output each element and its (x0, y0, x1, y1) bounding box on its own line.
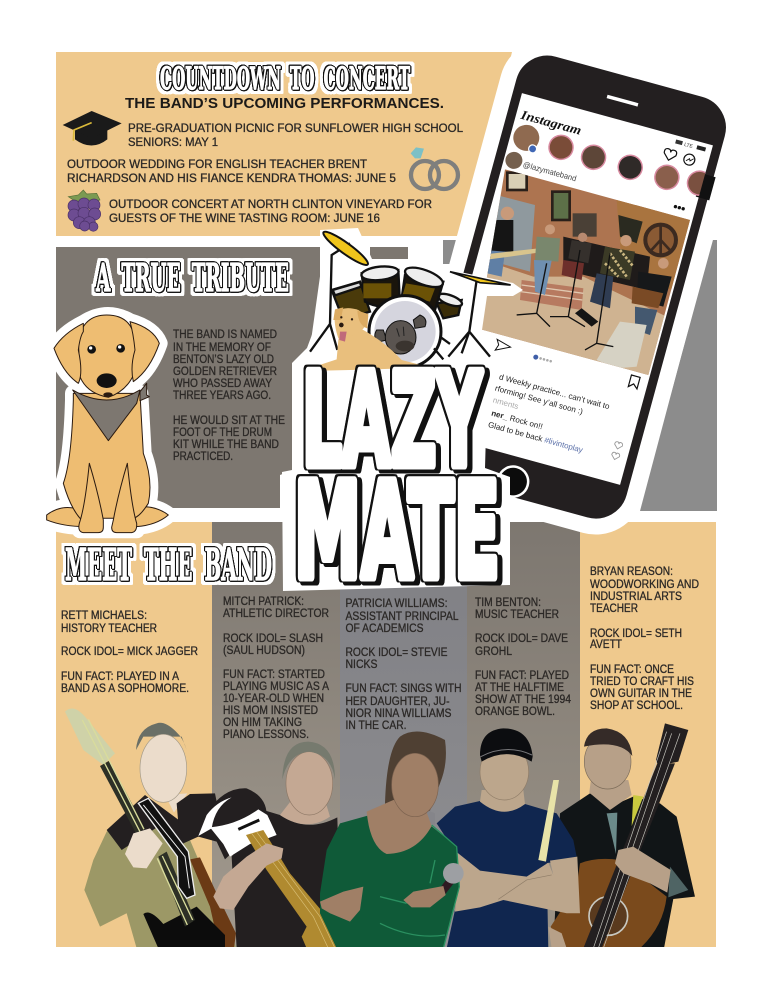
text: Mitch Patrick: PIANO LESSONS. (223, 729, 309, 741)
panel: meet the band columns (56, 522, 716, 947)
text: tribute story: FOOT OF THE DRUM (173, 427, 272, 439)
text: Bryan Reason: WOODWORKING AND (590, 579, 699, 591)
figure: Tim with drumstick (437, 728, 580, 948)
text: Patricia Williams: NIOR NINA WILLIAMS (346, 708, 452, 720)
toms (332, 264, 463, 320)
text: Bryan Reason: SHOP AT SCHOOL. (590, 700, 683, 712)
text: A TRUE TRIBUTE (96, 255, 289, 300)
text: COUNTDOWN TO CONCERT (160, 61, 410, 97)
illustration: band members (65, 708, 695, 948)
text: Patricia Williams: PATRICIA WILLIAMS: (346, 598, 448, 610)
text: tribute story: GOLDEN RETRIEVER (173, 366, 277, 378)
text: Rett Michaels (61, 610, 198, 695)
panel: a true tribute (56, 247, 322, 508)
icons: comment hearts (611, 441, 623, 461)
icon: graduation cap (63, 111, 122, 145)
text: Tim Benton (475, 597, 572, 718)
logo: LAZY MATE wordmark (294, 347, 500, 609)
Instagram interface (488, 110, 706, 460)
icon: sitting golden retriever (47, 315, 168, 533)
panel: countdown to concert (56, 52, 512, 236)
text: Tim Benton: FUN FACT: PLAYED (475, 670, 569, 682)
post caption: rforming! See y’all soon :) (494, 384, 584, 416)
text: Patricia Williams (346, 598, 462, 732)
text: tribute story: IN THE MEMORY OF (173, 342, 271, 354)
text: Bryan Reason: BRYAN REASON: (590, 566, 673, 578)
text: Tim Benton: ROCK IDOL= DAVE (475, 633, 568, 645)
text: Rett Michaels: ROCK IDOL= MICK JAGGER (61, 646, 198, 658)
text: tribute story: HE WOULD SIT AT THE (173, 415, 285, 427)
panel: grey backdrop right (640, 240, 717, 511)
text: Patricia Williams: OF ACADEMICS (346, 623, 424, 635)
text: Bryan Reason: FUN FACT: ONCE (590, 664, 674, 676)
status bar: LTE (683, 142, 694, 150)
photo of band practice (482, 170, 690, 375)
text: Mitch Patrick: ON HIM TAKING (223, 717, 302, 729)
text: Mitch Patrick: (SAUL HUDSON) (223, 645, 305, 657)
lying golden retriever (309, 307, 430, 371)
bass drum with buffalo (369, 296, 441, 368)
icon: send (494, 339, 512, 354)
icon: more dots (673, 205, 685, 211)
text: Patricia Williams: IN THE CAR. (346, 720, 406, 732)
post caption: nments (492, 396, 519, 411)
figure: Rett with guitar (65, 708, 237, 948)
text: Mitch Patrick: FUN FACT: STARTED (223, 669, 325, 681)
figure: Mitch with electric guitar (198, 742, 342, 948)
text: Mitch Patrick (223, 596, 329, 741)
text: Patricia Williams: ASSISTANT PRINCIPAL (346, 611, 459, 623)
logo: LAZY MATE wordmark: LAZY (302, 347, 483, 496)
text: tribute story: WHO PASSED AWAY (173, 378, 272, 390)
text: Mitch Patrick: ROCK IDOL= SLASH (223, 633, 323, 645)
phone body (400, 38, 743, 536)
right cymbal (448, 272, 511, 357)
text: Tim Benton: TIM BENTON: (475, 597, 541, 609)
text: tribute story: KIT WHILE THE BAND (173, 439, 279, 451)
text: Tim Benton: GROHL (475, 646, 513, 658)
text: upcoming performances: THE BAND’S UPCOMING PERFORMANCES. (125, 96, 444, 112)
text: upcoming performances: SENIORS: MAY 1 (128, 137, 218, 149)
figure: Bryan with acoustic guitar (548, 723, 695, 948)
text: Bryan Reason: TRIED TO CRAFT HIS (590, 676, 694, 688)
figure: Patricia with microphone (320, 732, 464, 948)
text: Patricia Williams: NICKS (346, 659, 378, 671)
story circles (513, 124, 706, 196)
text: Bryan Reason: ROCK IDOL= SETH (590, 628, 682, 640)
text: tribute story (173, 329, 285, 463)
Instagram wordmark: Instagram (518, 107, 583, 138)
icon: bookmark (628, 375, 640, 389)
text: tribute story: THREE YEARS AGO. (173, 390, 271, 402)
text: Rett Michaels: HISTORY TEACHER (61, 623, 157, 635)
text: Mitch Patrick: ATHLETIC DIRECTOR (223, 608, 329, 620)
post caption: Glad to be back #livintoplay (487, 420, 584, 455)
text: Bryan Reason: OWN GUITAR IN THE (590, 688, 692, 700)
text: Patricia Williams: HER DAUGHTER, JU- (346, 696, 450, 708)
left cymbal (310, 228, 371, 352)
post caption: ner_ Rock on!! (490, 409, 544, 431)
panel: grey backdrop behind drums (443, 240, 459, 264)
text: Patricia Williams: FUN FACT: SINGS WITH (346, 683, 462, 695)
profile handle: @lazymateband (522, 160, 577, 183)
text: Bryan Reason: INDUSTRIAL ARTS (590, 591, 682, 603)
text: Tim Benton: AT THE HALFTIME (475, 682, 564, 694)
profile handle (503, 150, 579, 186)
text: Rett Michaels: RETT MICHAELS: (61, 610, 147, 622)
text: MEET THE BAND (65, 540, 272, 591)
text: Bryan Reason: TEACHER (590, 603, 638, 615)
post caption (484, 372, 611, 459)
text: Tim Benton: MUSIC TEACHER (475, 609, 559, 621)
carousel dots (533, 354, 553, 364)
phone: Instagram post (449, 56, 726, 534)
text: upcoming performances: OUTDOOR WEDDING FOR ENGLISH TEACHER BRENT (67, 159, 367, 171)
text: Tim Benton: ORANGE BOWL. (475, 706, 555, 718)
text: Mitch Patrick: HIS MOM INSISTED (223, 705, 318, 717)
text: upcoming performances (67, 96, 464, 225)
text: tribute story: THE BAND IS NAMED (173, 329, 277, 341)
logo: drum kit (309, 228, 511, 371)
text: Rett Michaels: FUN FACT: PLAYED IN A (61, 671, 179, 683)
icon: wedding rings (411, 147, 458, 189)
text: Mitch Patrick: PLAYING MUSIC AS A (223, 681, 329, 693)
text: tribute story: BENTON’S LAZY OLD (173, 354, 274, 366)
icon: grapes (68, 190, 101, 231)
text: tribute story: PRACTICED. (173, 451, 233, 463)
logo: LAZY MATE wordmark: MATE (294, 455, 500, 609)
text: upcoming performances: OUTDOOR CONCERT AT NORTH CLINTON VINEYARD FOR (109, 199, 432, 211)
text: Mitch Patrick: MITCH PATRICK: (223, 596, 304, 608)
status bar (675, 139, 706, 153)
icons: heart and messenger (662, 147, 696, 167)
text: Rett Michaels: BAND AS A SOPHOMORE. (61, 683, 189, 695)
text: Tim Benton: SHOW AT THE 1994 (475, 694, 572, 706)
text: upcoming performances: PRE-GRADUATION PICNIC FOR SUNFLOWER HIGH SCHOOL (128, 123, 464, 135)
text: upcoming performances: GUESTS OF THE WINE TASTING ROOM: JUNE 16 (109, 213, 380, 225)
logo: white backing (282, 228, 523, 591)
text: Mitch Patrick: 10-YEAR-OLD WHEN (223, 693, 324, 705)
text: Bryan Reason (590, 566, 699, 712)
post caption: d Weekly practice... can’t wait to (498, 372, 611, 411)
text: Patricia Williams: ROCK IDOL= STEVIE (346, 647, 448, 659)
text: Bryan Reason: AVETT (590, 639, 622, 651)
panel: tribute top strip (370, 247, 408, 259)
text: upcoming performances: RICHARDSON AND HIS FIANCE KENDRA THOMAS: JUNE 5 (67, 173, 396, 185)
